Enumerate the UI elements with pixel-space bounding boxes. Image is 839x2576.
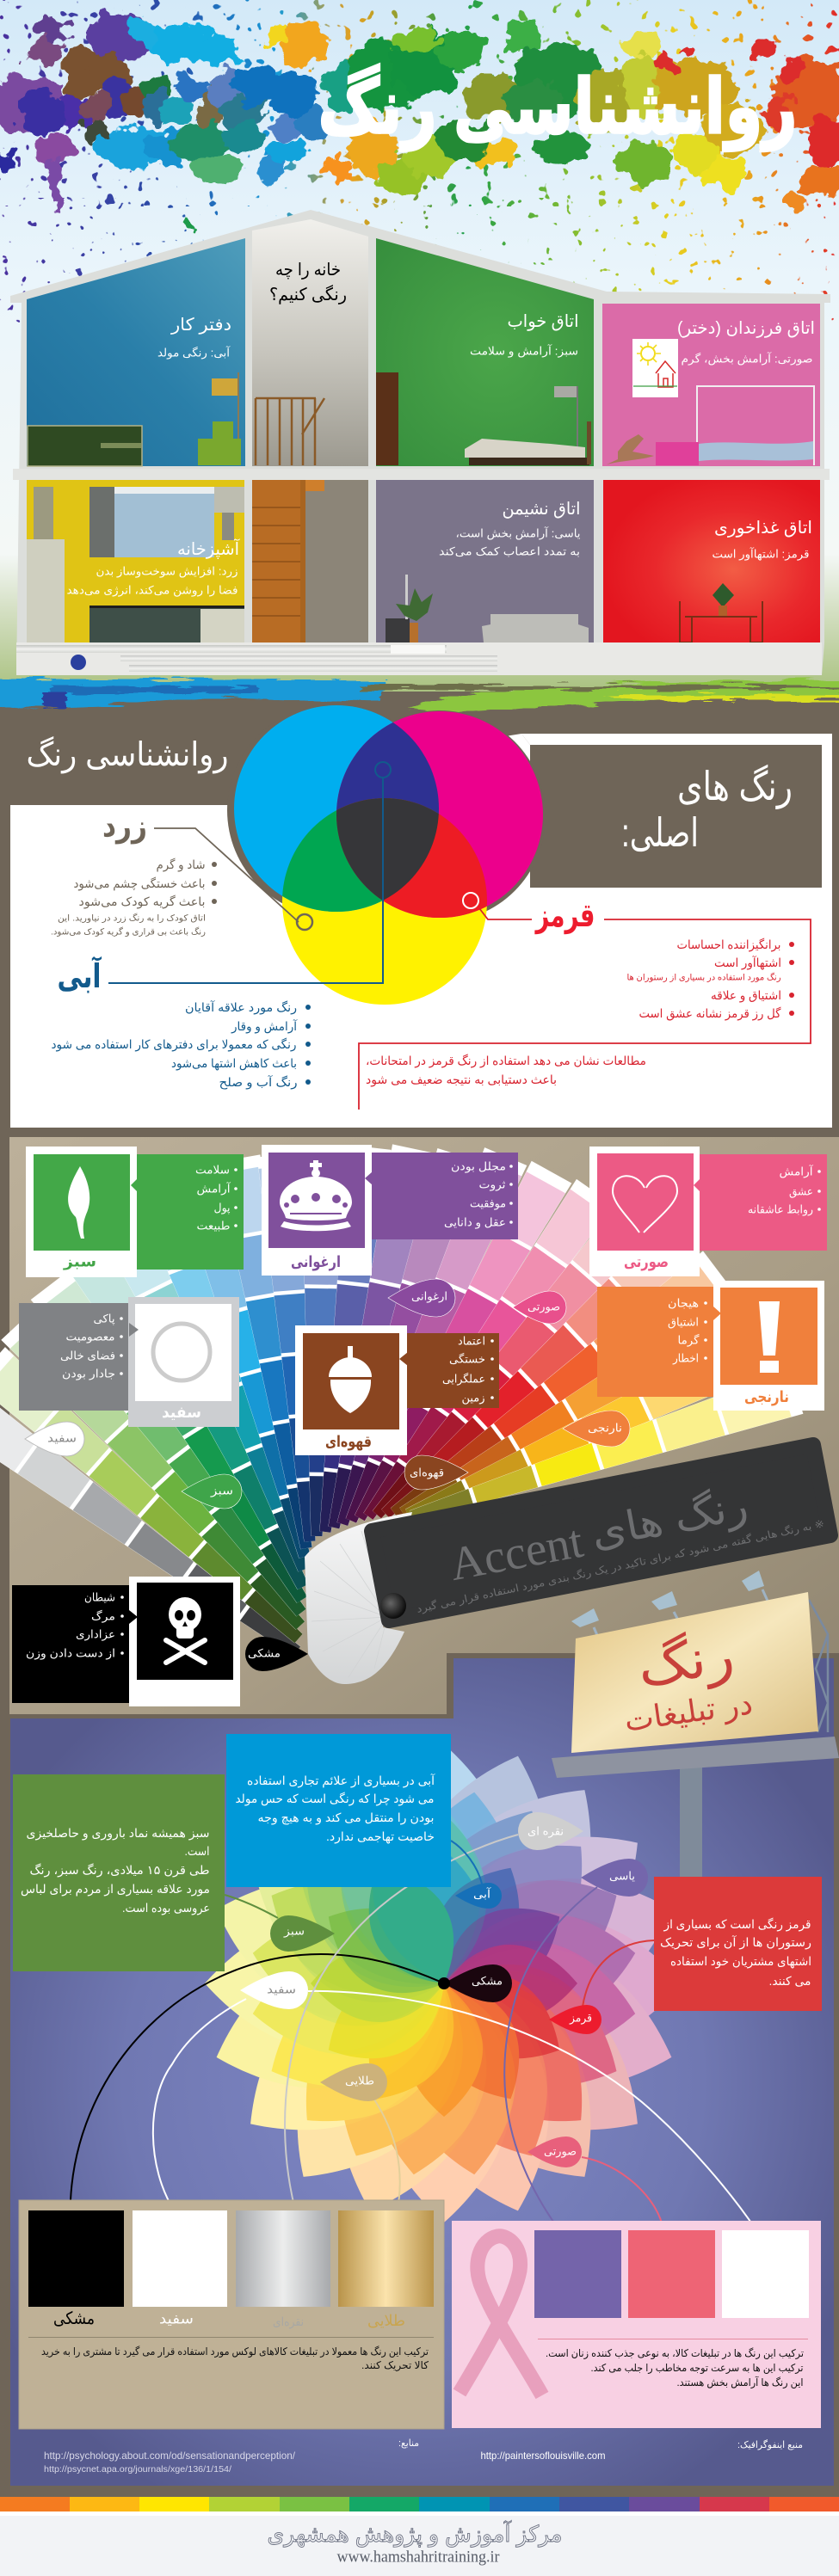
- panel: luxury colour combination: سفید: [159, 2310, 194, 2327]
- icon: leaf: [68, 1166, 89, 1239]
- callout: blue: باعث کاهش اشتها می‌شود: [171, 1056, 297, 1071]
- panel: women's colour combination: [452, 2221, 821, 2428]
- tag: black: مشکی: [248, 1646, 281, 1660]
- room: stair landing with question: [252, 219, 368, 466]
- tag: white: سفید: [47, 1431, 77, 1445]
- tag: orange: نارنجی: [588, 1421, 622, 1435]
- tag: brown: [404, 1455, 468, 1490]
- callout: red: اشتهای مشتریان خود استفاده: [670, 1954, 811, 1969]
- tag: blue: آبی: [473, 1887, 492, 1901]
- right white strip: [521, 734, 832, 888]
- room: kitchen: فضا را روشن می‌کند، انرژی می‌دهد: [67, 583, 238, 597]
- tag: lilac: یاسی: [609, 1870, 635, 1882]
- callout: blue: رنگی که معمولا برای دفترهای کار استفاده می شود: [52, 1037, 296, 1052]
- card: brown: [295, 1325, 499, 1455]
- callout: blue: رنگ مورد علاقه آقایان: [185, 1000, 297, 1015]
- tag: black: [245, 1637, 308, 1671]
- logo text: مرکز آموزش و پژوهش همشهری: [267, 2520, 563, 2548]
- room: dining room: اتاق غذاخوری: [714, 519, 812, 538]
- card: green: سلامت: [195, 1163, 230, 1177]
- left heading: روانشناسی رنگ: [26, 736, 229, 774]
- colour wheel venn diagram: [227, 704, 546, 1005]
- card: brown: زمین: [461, 1392, 485, 1405]
- tag: orange: [563, 1411, 630, 1447]
- panel: luxury colour combination: مشکی: [53, 2309, 95, 2328]
- sources: منبع اینفوگرافیک:: [737, 2439, 803, 2450]
- callout: blue: خاصیت تهاجمی ندارد.: [326, 1829, 435, 1844]
- card: white: فضای خالی: [60, 1349, 115, 1362]
- card: black: از دست دادن وزن: [26, 1646, 115, 1660]
- panel: women's colour combination: این رنگ ها آرامش بخش هستند.: [676, 2376, 804, 2389]
- panel: header background with paint splashes: [0, 0, 839, 692]
- callout: red: قرمز: [534, 898, 595, 934]
- callout: red: [654, 1877, 822, 2011]
- icon: child's drawing: [632, 339, 678, 397]
- panel: women's colour combination: ترکیب این ها به سرعت توجه مخاطب را جلب می کند.: [590, 2362, 804, 2375]
- panel: women's colour combination: ترکیب این رنگ ها در تبلیغات کالا، به نوعی جذب کننده زنان است.: [546, 2347, 804, 2360]
- callout: green: [13, 1774, 225, 1971]
- callout: red: قرمز رنگی است که بسیاری از: [663, 1917, 811, 1932]
- card: purple: ارغوانی: [291, 1253, 341, 1271]
- card: pink: آرامش: [780, 1165, 814, 1178]
- room: bedroom: سبز: آرامش و سلامت: [470, 344, 578, 358]
- card: brown: اعتماد: [458, 1335, 485, 1347]
- room: girl's bedroom: صورتی: آرامش بخش، گرم: [682, 351, 812, 366]
- tag: red: [549, 2005, 601, 2034]
- room: stair landing with question: رنگی کنیم؟: [269, 285, 347, 304]
- right heading box: [530, 745, 822, 888]
- website: www.hamshahritraining.ir: [337, 2548, 500, 2567]
- paint brush strokes: [0, 679, 839, 714]
- room: stair landing with question: خانه را چه: [275, 261, 341, 280]
- house base and steps: [16, 642, 822, 675]
- callout: green: طی قرن ۱۵ میلادی، رنگ سبز، رنگ: [29, 1863, 210, 1878]
- panel: advertising background: [10, 1658, 834, 2486]
- card: green: طبیعت: [196, 1220, 231, 1232]
- tag: white: سفید: [267, 1983, 296, 1995]
- fan handle: [372, 1445, 830, 1620]
- billboard: [552, 1571, 839, 1879]
- tag: purple: ارغوانی: [411, 1290, 447, 1304]
- tag: pink: [513, 1291, 566, 1324]
- card: white: [19, 1297, 239, 1427]
- callout: red: رستوران ها از آن برای تحریک: [660, 1935, 811, 1950]
- sources: http://psycnet.apa.org/journals/xge/136/1/154/: [44, 2464, 231, 2475]
- callout: blue: [52, 762, 391, 1090]
- card: orange: [597, 1281, 824, 1411]
- panel: accent colours background: [0, 1128, 839, 1730]
- tag: green: سبز: [210, 1485, 233, 1498]
- callout: red: برانگیزاننده احساسات: [676, 938, 781, 952]
- room: living room: یاسی: آرامش بخش است،: [456, 526, 581, 540]
- callout: red: باعث دستیابی به نتیجه ضعیف می شود: [366, 1073, 557, 1087]
- callout: blue: بودن را منتقل می کند و به هیچ وجه: [258, 1811, 434, 1825]
- callout: red: [359, 893, 811, 1110]
- card: brown: قهوه‌ای: [325, 1433, 372, 1451]
- callout: yellow: شاد و گرم: [157, 858, 205, 872]
- room: dining room: قرمز: اشتهاآور است: [713, 547, 809, 561]
- card: purple: [262, 1145, 518, 1276]
- footer strip: [0, 2486, 839, 2576]
- room: kitchen: [27, 480, 244, 642]
- callout: yellow: رنگ باعث بی قراری و گریه کودک می‌شود.: [51, 927, 206, 938]
- room: kitchen: زرد: افزایش سوخت‌وساز بدن: [96, 564, 238, 578]
- white paper stack of the fan: [305, 1512, 412, 1684]
- tag: pink: صورتی: [544, 2145, 577, 2159]
- card: pink: روابط عاشقانه: [748, 1202, 813, 1216]
- billboard: در تبلیغات: [622, 1685, 755, 1739]
- room: bedroom: اتاق خواب: [508, 312, 578, 331]
- fan handle: ※ به رنگ هایی گفته می شود که برای تاکید در یک رنگ بندی مورد استفاده قرار می گیرد: [416, 1517, 825, 1616]
- sources: منابع:: [398, 2438, 419, 2449]
- tag: gold: طلایی: [345, 2075, 374, 2087]
- card: pink: عشق: [789, 1185, 813, 1199]
- card: green: سبز: [63, 1254, 96, 1271]
- colour swatch fan: [0, 1144, 803, 1671]
- sources: [44, 2438, 803, 2475]
- fan handle: رنگ های: [587, 1481, 751, 1558]
- card: green: پول: [213, 1201, 231, 1214]
- callout: red: اشتیاق و علاقه: [711, 988, 781, 1003]
- card: green: آرامش: [196, 1182, 231, 1196]
- callout: red: رنگ مورد استفاده در بسیاری از رستوران ها: [626, 972, 781, 982]
- card: black: عزاداری: [76, 1627, 115, 1641]
- room: living room: به تمدد اعصاب کمک می‌کند: [439, 545, 580, 557]
- tag: brown: قهوه‌ای: [410, 1466, 444, 1479]
- callout: blue: [226, 1734, 451, 1887]
- card: pink: [589, 1147, 827, 1276]
- card: orange: اشتیاق: [668, 1316, 699, 1330]
- callout: blue: آرامش و وقار: [231, 1019, 298, 1034]
- room: lower stairs: [252, 480, 368, 642]
- callout: blue: رنگ آب و صلح: [219, 1075, 298, 1090]
- icon: crown: [280, 1160, 352, 1231]
- panel: house cross-section: [10, 210, 830, 675]
- callout: red: می کنند.: [769, 1974, 811, 1988]
- floor slab: [13, 469, 830, 480]
- card: purple: عقل و دانایی: [444, 1216, 506, 1230]
- card: green: [26, 1147, 244, 1277]
- callout: yellow: باعث خستگی چشم می‌شود: [74, 876, 205, 891]
- tag: white: [25, 1422, 84, 1456]
- room: girl's bedroom: [602, 304, 820, 466]
- sources: http://paintersoflouisville.com: [480, 2450, 606, 2462]
- icon: acorn: [329, 1346, 372, 1413]
- card: black: شیطان: [84, 1591, 115, 1603]
- callout: yellow: زرد: [102, 808, 147, 845]
- callout: green: سبز همیشه نماد باروری و حاصلخیزی: [26, 1826, 210, 1841]
- tag: blue: [455, 1883, 502, 1909]
- panel: primary colours background: [0, 679, 839, 1137]
- fan handle: Accent: [446, 1515, 587, 1590]
- card: purple: موفقیت: [470, 1197, 506, 1211]
- card: orange: گرما: [678, 1333, 700, 1347]
- room: girl's bedroom: اتاق فرزندان (دختر): [677, 319, 815, 338]
- tag: silver: [518, 1812, 583, 1850]
- callout: red: اشتهاآور است: [714, 956, 781, 970]
- card: orange: اخطار: [672, 1352, 699, 1366]
- flower colour wheel: [195, 1735, 693, 2232]
- tag: pink: [527, 2136, 582, 2167]
- card: purple: ثروت: [478, 1178, 506, 1192]
- card: pink: صورتی: [624, 1253, 669, 1271]
- callout: red: مطالعات نشان می دهد استفاده از رنگ قرمز در امتحانات،: [366, 1054, 646, 1068]
- card: brown: عملگرایی: [442, 1373, 485, 1386]
- room: dining room: [603, 480, 820, 642]
- card: white: پاکی: [93, 1313, 115, 1325]
- connector curves: [71, 1835, 756, 2230]
- panel: luxury colour combination: نقره‌ای: [273, 2315, 304, 2329]
- icon: exclamation mark: [759, 1301, 780, 1373]
- icon: skull and crossbones: [166, 1597, 205, 1663]
- tag: gold: [320, 2063, 387, 2101]
- room: office: آبی: رنگی مولد: [157, 346, 231, 360]
- card: white: سفید: [162, 1404, 201, 1421]
- card: brown: خستگی: [449, 1352, 485, 1366]
- tag: black: [438, 1964, 512, 2002]
- tag: pink: صورتی: [527, 1300, 560, 1314]
- sources: http://psychology.about.com/od/sensationandperception/: [44, 2450, 296, 2462]
- callout: red: گل رز قرمز نشانه عشق است: [639, 1006, 781, 1021]
- panel: luxury colour combination: ترکیب این رنگ ها معمولا در تبلیغات کالاهای لوکس مورد استفاده قرار می گیرد تا مشتری را به خرید: [41, 2345, 429, 2358]
- card: white: معصومیت: [65, 1330, 115, 1343]
- panel: luxury colour combination: طلایی: [367, 2312, 405, 2329]
- room: office: دفتر کار: [170, 316, 231, 335]
- room: living room: اتاق نشیمن: [503, 500, 580, 519]
- rainbow bar: [0, 2497, 839, 2511]
- callout: green: عروسی بوده است.: [122, 1901, 210, 1915]
- panel: luxury colour combination: کالا تحریک کنند.: [361, 2359, 429, 2372]
- white text panel: [10, 734, 832, 1128]
- tag: silver: نقره ای: [527, 1825, 564, 1839]
- tag: red: قرمز: [569, 2011, 592, 2025]
- tag: green: [270, 1915, 335, 1952]
- card: black: [12, 1577, 240, 1706]
- card: purple: مجلل بودن: [451, 1159, 506, 1173]
- callout: yellow: باعث گریه کودک می‌شود: [79, 895, 205, 909]
- callout: green: است.: [184, 1844, 210, 1858]
- card: black: مرگ: [91, 1608, 115, 1624]
- icon: pink ribbon: [460, 2236, 542, 2395]
- callout: blue: می شود چرا که رنگی است که حس مولد: [236, 1792, 434, 1806]
- tag: green: [182, 1474, 242, 1509]
- room: living room: [376, 480, 594, 642]
- tag: black: مشکی: [472, 1975, 503, 1987]
- right heading box: رنگ های: [677, 764, 793, 809]
- callout: blue: آبی در بسیاری از علائم تجاری استفاده: [247, 1774, 435, 1788]
- card: orange: نارنجی: [744, 1388, 789, 1405]
- card: orange: هیجان: [668, 1297, 699, 1309]
- icon: heart: [613, 1176, 677, 1233]
- callout: green: مورد علاقه بسیاری از مردم برای لباس: [21, 1882, 210, 1897]
- room: kitchen: آشپزخانه: [177, 538, 240, 560]
- right heading box: اصلی:: [621, 810, 699, 855]
- tag: green: سبز: [283, 1925, 305, 1939]
- room: office: [27, 238, 245, 466]
- callout: yellow: اتاق کودک را به رنگ زرد در نیاورید. این: [58, 913, 206, 924]
- icon: ring: [153, 1324, 210, 1380]
- panel: luxury colour combination: [19, 2200, 444, 2429]
- callout: yellow: [51, 808, 312, 938]
- tag: white: [240, 1971, 308, 2009]
- tag: purple: [388, 1279, 455, 1317]
- billboard: رنگ: [634, 1625, 737, 1699]
- room: bedroom: [376, 238, 594, 466]
- callout: blue: آبی: [57, 956, 102, 995]
- tag: lilac: [581, 1859, 648, 1897]
- card: white: جادار بودن: [62, 1368, 115, 1381]
